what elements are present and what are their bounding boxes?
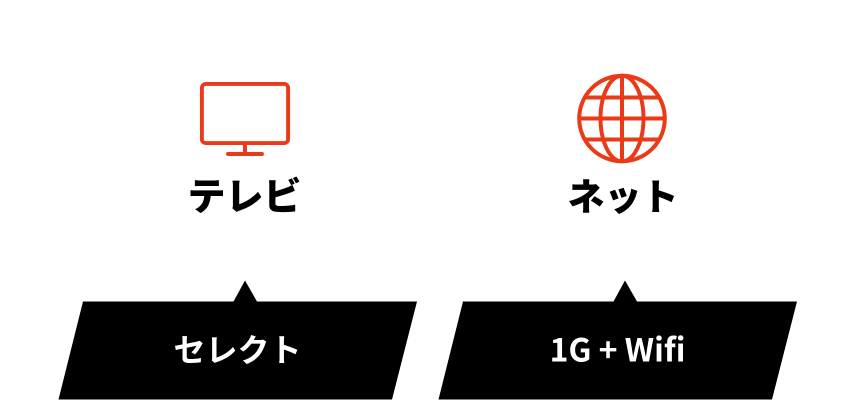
- label: セレクト: セレクト: [173, 326, 302, 372]
- icon: television: [202, 84, 288, 154]
- icon: globe: [579, 76, 665, 162]
- label: 1G + Wifi: 1G + Wifi: [550, 326, 685, 372]
- panel: 1G + Wifi: [438, 280, 797, 400]
- panel: セレクト: [58, 280, 417, 400]
- heading: テレビ: テレビ: [187, 166, 302, 221]
- heading: ネット: ネット: [568, 167, 678, 221]
